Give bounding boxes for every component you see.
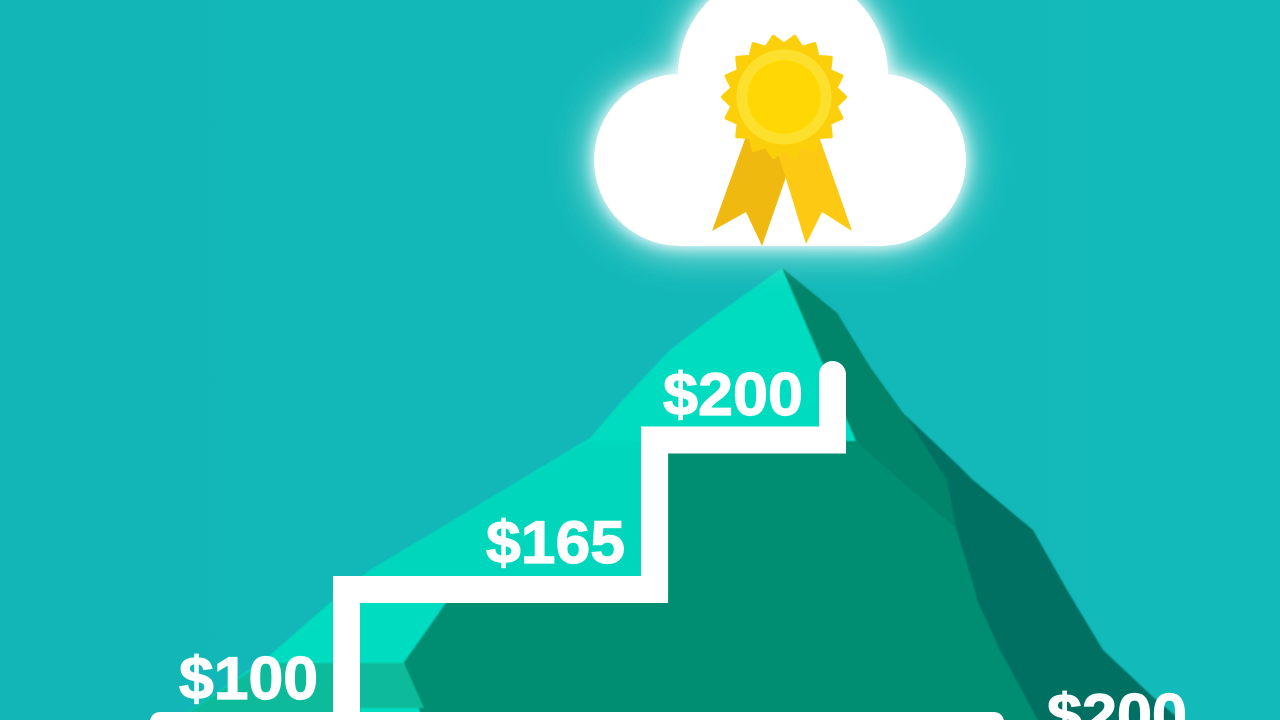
mountain: base toe: [170, 663, 424, 720]
mountain: dark upper shadow face: [782, 268, 956, 530]
right ribbon tail: [775, 125, 852, 244]
cloud inner glow: [593, 0, 967, 247]
mountain: upper main shade: [856, 427, 956, 528]
staircase top cap: [819, 361, 846, 388]
label: $200 top step: $200: [663, 361, 803, 428]
icon: award ribbon rosette: [712, 37, 852, 246]
mountain: [170, 268, 1190, 720]
base line: [150, 712, 1004, 720]
label: $100 bottom step: $100: [179, 645, 318, 712]
label: $165 middle step: $165: [486, 509, 625, 576]
mountain: darkest right face: [782, 268, 1190, 720]
mountain: lower lit band: [362, 441, 641, 576]
cloud: [594, 0, 966, 246]
cloud glow: [592, 0, 968, 248]
mountain: lit left face: [170, 268, 856, 720]
mountain: main green face: [404, 441, 1042, 720]
left ribbon tail: [712, 125, 790, 246]
rosette: [723, 37, 845, 157]
staircase line: [346, 374, 832, 720]
